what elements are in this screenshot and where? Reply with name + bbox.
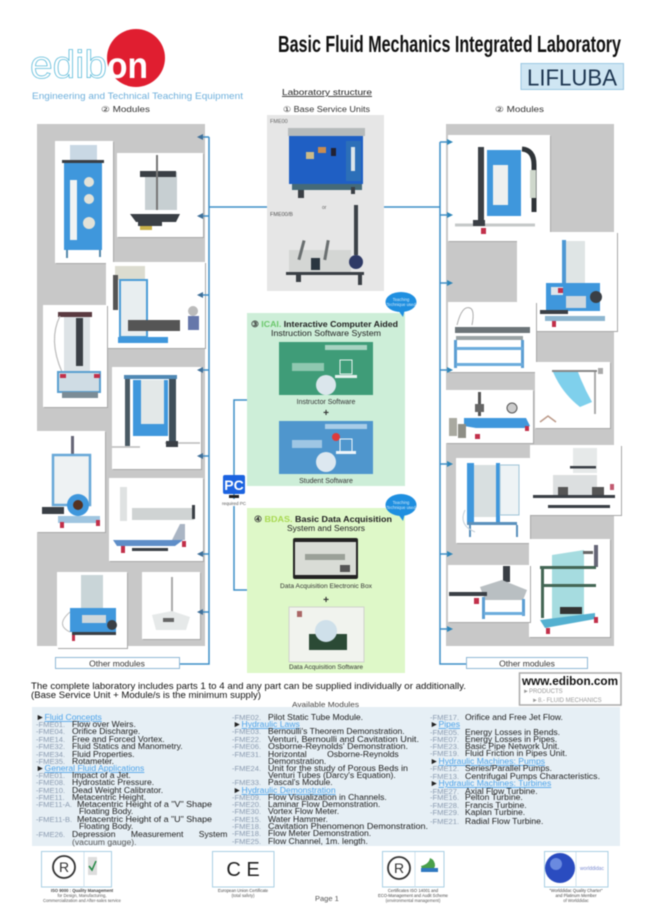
list column 2: -FME20.: [232, 800, 261, 809]
list column 2: -FME03.: [232, 727, 261, 736]
list column 3: -FME17.: [430, 713, 459, 722]
certificate: CE: [212, 852, 274, 898]
machine: FME00/B basic bench: [270, 205, 364, 285]
module card 4: [43, 305, 107, 407]
right module card 2: [517, 232, 617, 331]
logo: edibon: on: [107, 45, 148, 86]
list column 2: -FME02.: [232, 713, 261, 722]
device: electronic box: [293, 538, 358, 579]
certificate: ISO 14001: (environmental management): [386, 898, 441, 903]
list column 1: -FME11.: [36, 793, 65, 802]
connector: right module bus with arrows: [384, 139, 466, 664]
panel: BDAS data acquisition: [247, 508, 405, 673]
list column 1: -FME01.: [36, 771, 65, 780]
connector: PC bracket: [234, 400, 247, 590]
module card 1: [55, 141, 113, 263]
list column 3: Axial Flow Turbine.: [465, 786, 538, 796]
right module card 9: [448, 565, 530, 622]
panel: right modules: [446, 124, 621, 646]
right module card 8: [529, 539, 610, 637]
list column 3: Energy Losses in Pipes.: [465, 734, 557, 744]
machine: FME00 hydraulic bench: FME00: [270, 119, 288, 125]
list column 3: ►Hydraulic Machines: Turbines: [430, 778, 551, 788]
screen: acquisition software: [289, 607, 364, 662]
heading: BDAS: ④ BDAS. Basic Data Acquisition: [254, 514, 392, 524]
heading: ICAI: ③ ICAI. Interactive Computer Aided: [251, 319, 398, 329]
certificate: ISO 9000: ISO 9000 : Quality Management: [51, 888, 114, 893]
certificate: Worlddidac: of Worlddidac: [563, 898, 589, 903]
certificate: ISO 9000: [42, 852, 122, 903]
caption: electronic box: Data Acquisition Electronic Box: [280, 583, 373, 590]
list column 2: Laminar Flow Demonstration.: [268, 799, 380, 809]
heading: laboratory structure: Laboratory structure: [282, 87, 372, 97]
screen: student software: [279, 421, 373, 474]
right module card 6: [456, 458, 530, 543]
certificate: CE: C E: [226, 859, 260, 881]
list column 3: -FME29.: [430, 808, 459, 817]
list column 1: ►General Fluid Applications: [36, 763, 144, 773]
list column 3: -FME28.: [430, 801, 459, 810]
right module card 3: [448, 302, 536, 372]
website box: [520, 673, 621, 705]
label: other modules left: [56, 658, 180, 668]
certificate: Worlddidac: and Platinum Member: [556, 893, 597, 898]
product code: LIFLUBA: LIFLUBA: [527, 64, 618, 90]
list column 1: Floating Body.: [79, 806, 133, 816]
right module card 4: [535, 362, 610, 428]
heading: right modules: ② Modules: [495, 105, 544, 114]
text block: supply note: [31, 681, 466, 700]
list column 1: ►Fluid Concepts: [36, 712, 102, 722]
callout bubble: ICAI: [386, 292, 416, 317]
panel: left modules: [37, 124, 205, 648]
list column 2: -FME06.: [232, 742, 261, 751]
callout bubble: BDAS: [386, 494, 416, 521]
list column 2: -FME09.: [232, 793, 261, 802]
plus sign: +: [323, 595, 329, 606]
list column 2: Vortex Flow Meter.: [268, 806, 339, 816]
list column 1: -FME34.: [36, 750, 65, 759]
list column 1: -FME35.: [36, 757, 65, 766]
list column 2: Pascal's Module.: [268, 777, 333, 787]
certificate: ISO 14001: [378, 852, 449, 903]
list column 3: Kaplan Turbine.: [465, 807, 525, 817]
callout bubble: BDAS: Teaching: [393, 500, 410, 505]
list column 2: [232, 712, 428, 846]
list column 2: Horizontal Osborne-Reynolds: [268, 749, 399, 759]
website box: ►PRODUCTS: [523, 689, 563, 695]
module card 6: [37, 431, 105, 532]
list column 3: ►Hydraulic Machines: Pumps: [430, 756, 545, 766]
list column 2: Water Hammer.: [268, 814, 328, 824]
list column 1: [36, 712, 227, 847]
list column 3: [430, 712, 600, 826]
list column 2: -FME30.: [232, 807, 261, 816]
list column 1: -FME26.: [36, 830, 65, 839]
panel: available modules list: [32, 707, 620, 847]
list column 3: Radial Flow Turbine.: [465, 816, 543, 826]
list column 1: -FME11-B.: [36, 815, 72, 824]
list column 1: Impact of a Jet.: [72, 770, 131, 780]
certificate: ISO 9000: for Design, Manufacturing,: [57, 893, 107, 898]
icon: PC: [218, 475, 250, 506]
caption: acquisition software: Data Acquisition Software: [289, 664, 363, 671]
certificate: ISO 9000: R: [59, 859, 69, 875]
list column 2: -FME24.: [232, 764, 261, 773]
list column 1: -FME14.: [36, 735, 65, 744]
list column 3: Pelton Turbine.: [465, 792, 523, 802]
connector: left module bus with arrows: [179, 134, 267, 664]
page number: Page 1: [315, 894, 339, 903]
panel: ICAI software: [247, 313, 405, 486]
list column 2: -FME22.: [232, 735, 261, 744]
screen: instructor software: [279, 342, 373, 395]
list column 1: Hydrostatic Pressure.: [72, 777, 154, 787]
list column 2: -FME25.: [232, 837, 261, 846]
list column 2: Demonstration.: [268, 756, 326, 766]
module card 8: [57, 572, 127, 648]
list column 2: Unit for the study of Porous Beds in: [268, 763, 408, 773]
list column 1: Dead Weight Calibrator.: [72, 785, 163, 795]
list column 2: Cavitation Phenomenon Demonstration.: [268, 821, 428, 831]
list column 2: -FME18.: [232, 829, 261, 838]
caption: student software: Student Software: [299, 478, 353, 485]
subheading: BDAS: System and Sensors: [287, 524, 365, 533]
list column 1: -FME11-A.: [36, 800, 72, 809]
website box: www.edibon.com: [521, 676, 618, 688]
list column 1: Flow over Weirs.: [72, 719, 136, 729]
list column 2: Osborne-Reynolds' Demonstration.: [268, 741, 408, 751]
right module card 7: [530, 445, 621, 515]
list column 2: -FME31.: [232, 750, 261, 759]
website box: ►8.- FLUID MECHANICS: [532, 698, 602, 704]
icon: PC: PC: [224, 477, 244, 493]
list column 1: Depression Measurement System: [72, 829, 227, 839]
machine: FME00 hydraulic bench: [270, 119, 365, 198]
list column 2: ►Hydraulic Demonstration: [233, 785, 336, 795]
list column 3: -FME07.: [430, 735, 459, 744]
logo: edibon: edib: [30, 44, 107, 87]
module card 3: [106, 262, 205, 348]
certificate: ISO 14001: Certificates ISO 14001 and: [388, 888, 439, 893]
list column 1: Metacentric Height of a "V" Shape: [77, 799, 212, 809]
list column 2: -FME15.: [232, 815, 261, 824]
list column 1: Rotameter.: [72, 756, 114, 766]
heading: available modules: Available Modules: [292, 700, 359, 709]
list column 3: -FME19.: [430, 749, 459, 758]
text block: supply note: (Base Service Unit + Module/s is the minimum supply): [31, 690, 261, 700]
module card 5: [112, 367, 201, 469]
list column 3: -FME05.: [430, 728, 459, 737]
list column 1: Metacentric Height.: [72, 792, 146, 802]
list column 1: Orifice Discharge.: [72, 726, 140, 736]
logo: edibon: [30, 29, 165, 87]
list column 3: Centrifugal Pumps Characteristics.: [465, 771, 600, 781]
heading: left modules: ② Modules: [101, 105, 150, 114]
icon: PC: required PC: [222, 501, 247, 506]
list column 3: Basic Pipe Network Unit.: [465, 741, 560, 751]
list column 2: Pilot Static Tube Module.: [268, 712, 363, 722]
subheading: ICAI: Instruction Software System: [271, 329, 381, 338]
callout bubble: ICAI: Technique used: [386, 302, 416, 307]
label: other modules right: [466, 658, 588, 668]
callout bubble: BDAS: Technique used: [386, 505, 416, 510]
machine: FME00/B basic bench: FME00/B: [270, 212, 293, 218]
machine: FME00/B basic bench: or: [322, 205, 327, 211]
list column 1: -FME04.: [36, 727, 65, 736]
list column 2: -FME33.: [232, 778, 261, 787]
certificate: ISO 9000: Commercialization and After-sales service: [43, 898, 122, 903]
panel: base service units: [267, 115, 384, 291]
list column 3: -FME12.: [430, 764, 459, 773]
list column 1: Free and Forced Vortex.: [72, 734, 165, 744]
certificate: Worlddidac: "Worlddidac Quality Charter": [549, 888, 603, 893]
module card 7: [109, 478, 203, 561]
list column 3: ►Pipes: [430, 719, 460, 729]
list column 3: Francis Turbine.: [465, 800, 527, 810]
list column 2: Venturi, Bernoulli and Cavitation Unit.: [268, 734, 419, 744]
list column 1: Metacentric Height of a "U" Shape: [77, 814, 212, 824]
caption: instructor software: Instructor Software: [297, 399, 355, 406]
label: other modules right: Other modules: [499, 658, 555, 668]
right module card 5: [446, 390, 533, 443]
list column 3: Orifice and Free Jet Flow.: [465, 712, 563, 722]
list column 3: Energy Losses in Bends.: [465, 727, 560, 737]
list column 2: Bernoulli's Theorem Demonstration.: [268, 726, 405, 736]
plus sign: +: [323, 408, 329, 419]
list column 3: -FME23.: [430, 742, 459, 751]
list column 3: -FME16.: [430, 793, 459, 802]
list column 1: Floating Body.: [79, 821, 133, 831]
list column 2: Venturi Tubes (Darcy's Equation).: [268, 770, 396, 780]
list column 1: -FME10.: [36, 786, 65, 795]
list column 3: -FME13.: [430, 772, 459, 781]
certificate: Worlddidac: [544, 852, 608, 903]
list column 1: -FME32.: [36, 742, 65, 751]
certificate: ISO 14001: R: [394, 860, 404, 876]
list column 1: Fluid Statics and Manometry.: [72, 741, 183, 751]
certificate: Worlddidac: worlddidac: [580, 866, 604, 872]
module card 9: [142, 572, 200, 639]
label: other modules left: Other modules: [89, 658, 145, 668]
heading: base service units: ① Base Service Units: [283, 105, 370, 114]
list column 2: Flow Visualization in Channels.: [268, 792, 387, 802]
certificate: CE: European Union Certificate: [218, 888, 269, 893]
list column 2: Flow Meter Demonstration.: [268, 828, 371, 838]
list column 3: -FME27.: [430, 787, 459, 796]
list column 3: Fluid Friction in Pipes Unit.: [465, 748, 567, 758]
list column 3: Series/Parallel Pumps.: [465, 763, 552, 773]
list column 2: Flow Channel, 1m. length.: [268, 836, 368, 846]
right module card 1: [448, 135, 550, 241]
certificate: CE: (total safety): [231, 893, 255, 898]
text block: supply note: The complete laboratory includes parts 1 to 4 and any part can be supplied individually or additionally.: [31, 681, 466, 691]
list column 2: -FME18.: [232, 822, 261, 831]
module card 2: [117, 153, 203, 237]
list column 1: -FME01.: [36, 720, 65, 729]
list column 2: ►Hydraulic Laws: [233, 719, 300, 729]
tagline: Engineering and Technical Teaching Equipment: [32, 91, 243, 102]
callout bubble: ICAI: Teaching: [393, 297, 410, 302]
certificate: ISO 14001: ECO-Management and Audit Scheme: [378, 893, 449, 898]
list column 3: -FME21.: [430, 817, 459, 826]
list column 1: -FME08.: [36, 778, 65, 787]
list column 1: Fluid Properties.: [72, 749, 135, 759]
list column 1: (vacuum gauge).: [72, 837, 136, 847]
